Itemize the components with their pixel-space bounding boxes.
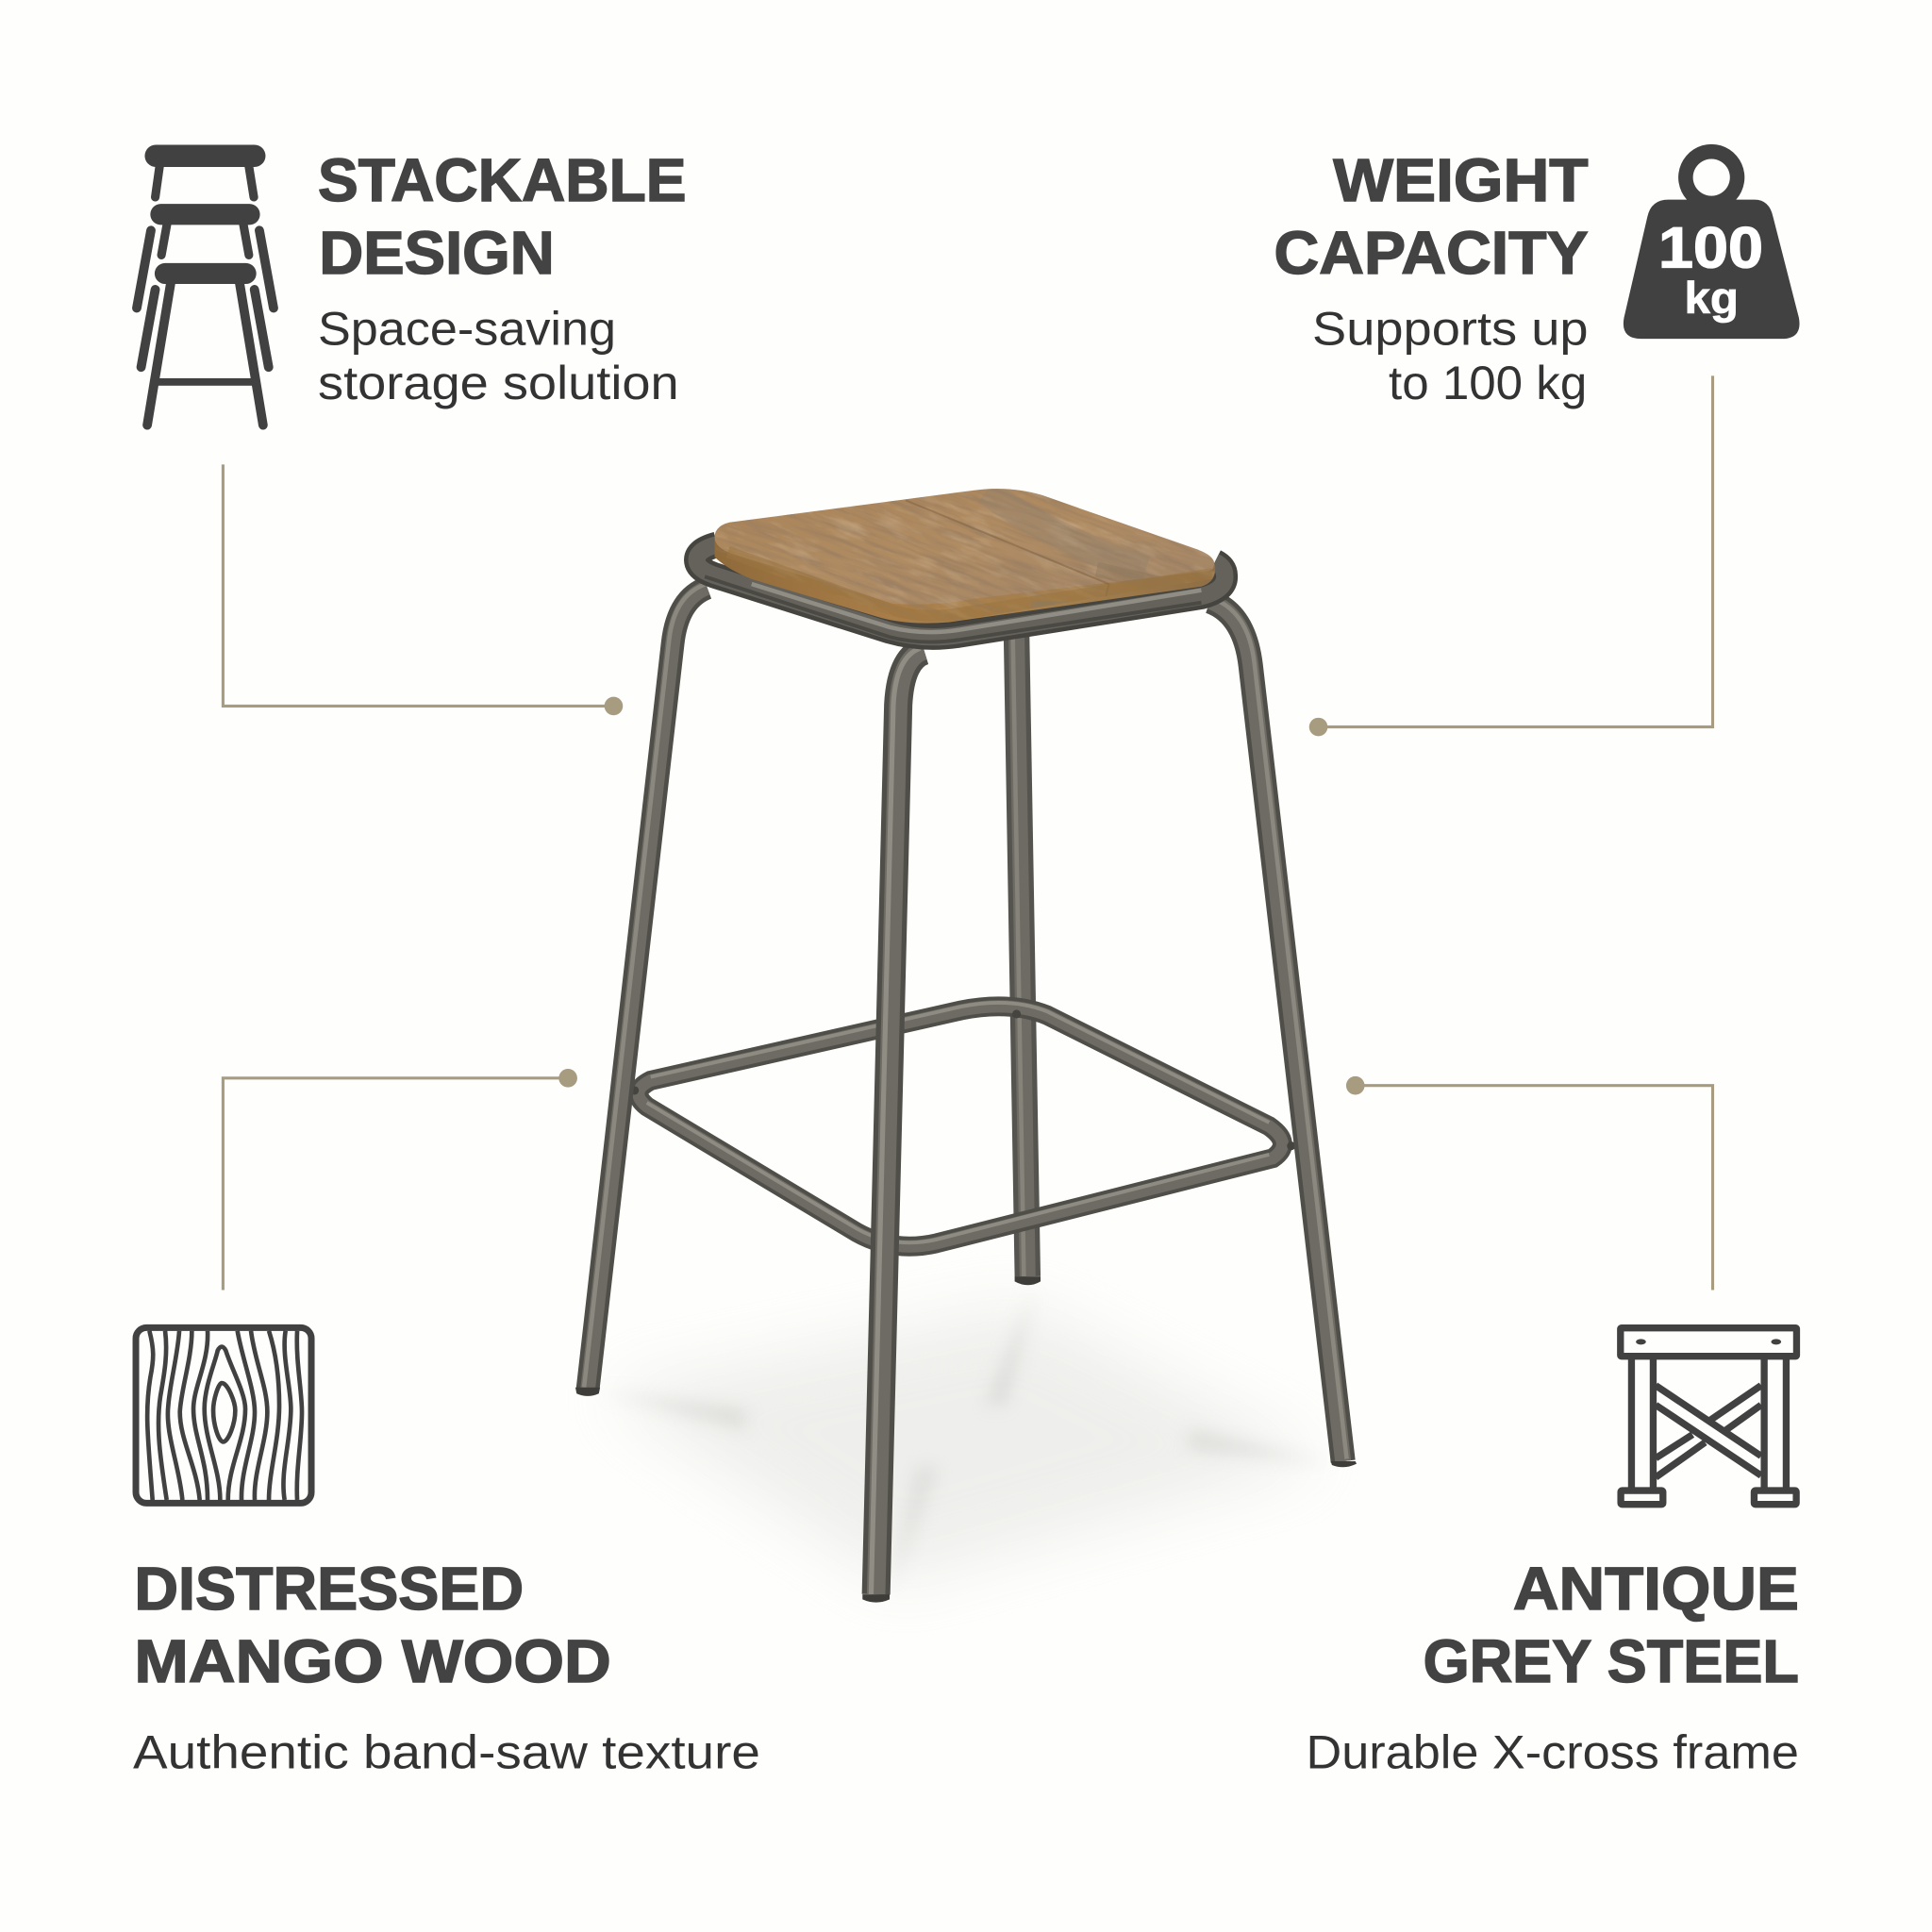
panel: antique grey steel	[1306, 1328, 1799, 1778]
icon: x-cross frame	[1621, 1328, 1796, 1505]
callout line: grey steel	[1346, 1076, 1713, 1291]
front leg	[862, 648, 924, 1603]
description: storage solution	[318, 357, 679, 409]
heading: WEIGHT	[1333, 146, 1589, 214]
description: to 100 kg	[1389, 357, 1587, 409]
heading: STACKABLE	[318, 146, 687, 214]
heading	[1424, 1555, 1799, 1695]
callout line: stackable design	[223, 464, 623, 715]
icon: stacked stools	[137, 144, 274, 425]
heading: GREY STEEL	[1424, 1627, 1799, 1695]
panel: distressed mango wood	[133, 1327, 760, 1778]
heading	[1274, 146, 1589, 287]
heading	[318, 146, 687, 287]
right leg	[1210, 597, 1357, 1467]
wooden seat	[715, 489, 1215, 624]
description	[1312, 303, 1589, 409]
heading: ANTIQUE	[1513, 1555, 1799, 1623]
seat frame	[697, 537, 1224, 642]
icon: wood grain	[136, 1327, 311, 1503]
description: Durable X-cross frame	[1306, 1725, 1799, 1778]
heading: DISTRESSED	[134, 1555, 524, 1623]
left leg	[575, 584, 708, 1396]
description	[318, 303, 679, 409]
icon: 100 kg weight: 100	[1658, 215, 1763, 280]
heading: DESIGN	[319, 219, 555, 287]
description: Space-saving	[318, 303, 616, 356]
heading: MANGO WOOD	[134, 1627, 611, 1695]
callout line: mango wood	[223, 1069, 577, 1291]
description: Supports up	[1312, 303, 1589, 356]
panel: weight capacity	[1274, 144, 1800, 409]
heading	[134, 1555, 611, 1695]
callout line: weight capacity	[1309, 375, 1713, 736]
heading: CAPACITY	[1274, 219, 1589, 287]
back leg	[1013, 635, 1041, 1285]
panel: stackable design	[137, 144, 687, 425]
floor shadow	[601, 1289, 1333, 1594]
description: Authentic band-saw texture	[133, 1725, 760, 1778]
icon: 100 kg weight	[1624, 144, 1800, 339]
stool photo illustration	[575, 489, 1357, 1603]
icon: 100 kg weight: kg	[1684, 273, 1739, 323]
footrest ring	[630, 1003, 1295, 1246]
